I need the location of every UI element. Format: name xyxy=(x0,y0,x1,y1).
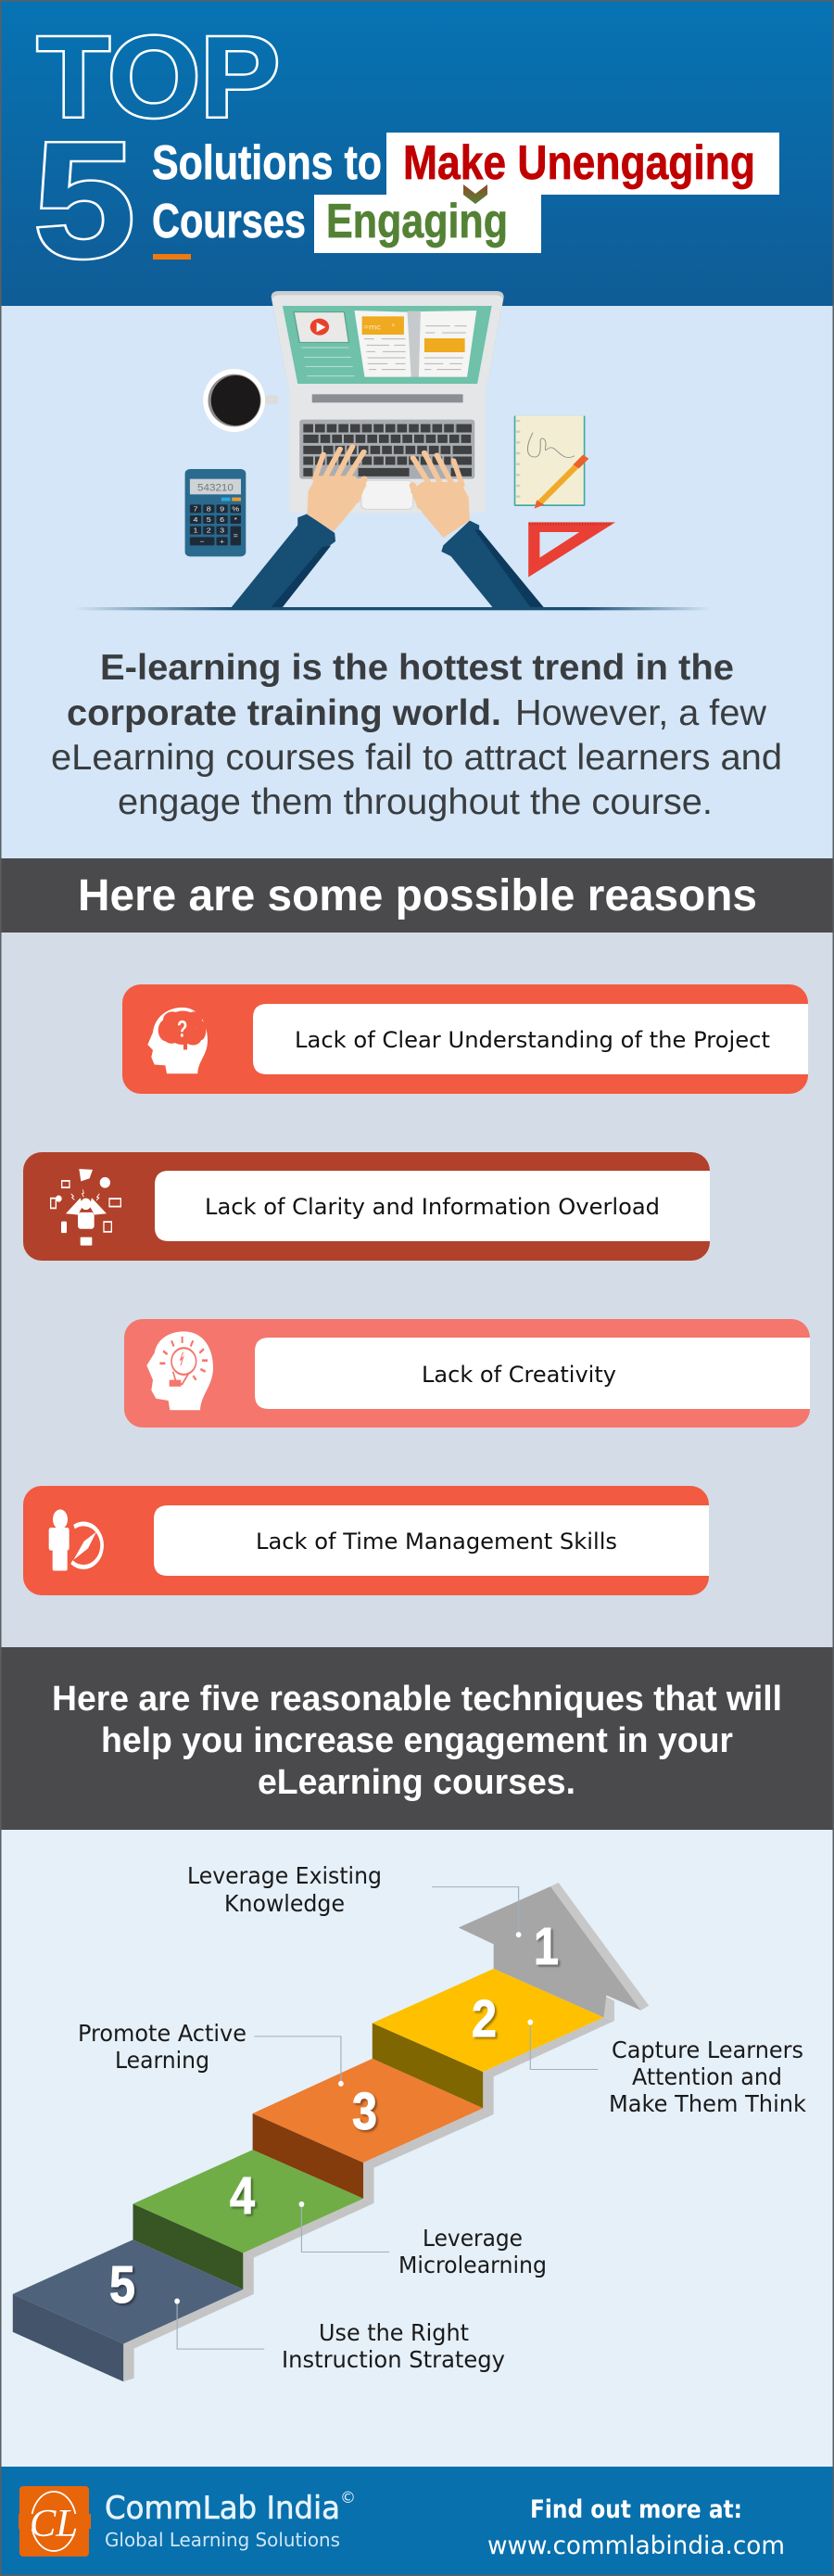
intro line 3: eLearning courses fail to attract learners and xyxy=(51,738,782,778)
label: promote active learning xyxy=(78,2020,246,2074)
title xyxy=(33,13,779,292)
section heading: five techniques: Here are five reasonable techniques that will xyxy=(52,1680,782,1719)
step numbers: 1 xyxy=(534,1917,559,1976)
label: leverage existing knowledge xyxy=(187,1862,382,1917)
step numbers: 4 xyxy=(230,2166,255,2226)
call to action: Find out more at: xyxy=(530,2495,742,2524)
icon: calculator: 5 xyxy=(207,516,211,524)
icon: calculator: 8 xyxy=(207,505,211,513)
step numbers: 5 xyxy=(109,2255,135,2315)
section heading: possible reasons: Here are some possible reasons xyxy=(78,871,757,920)
label: capture learners attention: Attention and xyxy=(632,2063,782,2090)
chart: staircase arrow xyxy=(13,1883,649,2381)
step numbers xyxy=(109,1917,559,2315)
right hand and sleeve xyxy=(411,452,544,607)
panel: reason 4 xyxy=(23,1486,709,1595)
copyright mark: © xyxy=(340,2489,356,2507)
section heading: five techniques xyxy=(0,1647,834,1830)
label: right instruction strategy: Instruction Strategy xyxy=(282,2346,505,2373)
laptop lid: 2 xyxy=(391,323,395,328)
title text: engaging: Engaging xyxy=(326,195,508,248)
step labels xyxy=(78,1862,807,2373)
icon: calculator: 6 xyxy=(220,516,225,524)
icon: calculator: 7 xyxy=(194,505,198,513)
reason 2 label: Lack of Clarity and Information Overload xyxy=(205,1194,660,1220)
highlight box: make unengaging xyxy=(386,133,779,195)
panel: reason 3 xyxy=(124,1319,810,1428)
icon: calculator: 4 xyxy=(194,516,198,524)
footer xyxy=(0,2467,834,2576)
title: outlined 5: 5 xyxy=(33,108,135,292)
label: leverage existing knowledge: Knowledge xyxy=(224,1890,345,1917)
icon: head with light bulb xyxy=(146,1331,213,1410)
label: capture learners attention xyxy=(609,2037,807,2117)
title text: make unengaging: Make Unengaging xyxy=(403,136,755,190)
left hand and sleeve xyxy=(232,447,367,607)
title text: solutions to: Solutions to xyxy=(152,136,382,190)
icon: calculator: = xyxy=(234,532,238,539)
logo: CommLab CL mark: CL xyxy=(30,2503,78,2545)
brand name: CommLab India xyxy=(105,2490,340,2527)
icon: calculator xyxy=(185,469,246,556)
icon: calculator: − xyxy=(199,538,205,545)
section heading: possible reasons xyxy=(0,858,834,933)
title: outlined TOP: TOP xyxy=(37,13,280,141)
panel: reason 1 xyxy=(122,984,808,1094)
icon: calculator: 9 xyxy=(220,505,225,513)
laptop base xyxy=(289,392,486,513)
panel: header banner xyxy=(0,0,834,306)
intro line 1: E-learning is the hottest trend in the xyxy=(100,648,734,688)
reason 1 label: Lack of Clear Understanding of the Project xyxy=(295,1027,770,1053)
label: leverage existing knowledge: Leverage Existing xyxy=(187,1862,382,1889)
icon: head with question mark: ? xyxy=(177,1016,187,1042)
label: right instruction strategy: Use the Right xyxy=(319,2319,469,2346)
logo: CommLab CL mark xyxy=(19,2486,91,2557)
icon: overloaded person xyxy=(51,1169,120,1246)
step 2 xyxy=(373,1969,614,2114)
label: capture learners attention: Capture Learners xyxy=(612,2037,803,2063)
icon: person with compass clock xyxy=(49,1509,102,1570)
reason 4 label: Lack of Time Management Skills xyxy=(256,1529,617,1554)
brand tagline: Global Learning Solutions xyxy=(105,2529,340,2551)
accent: orange bar xyxy=(153,254,191,260)
icon: calculator: * xyxy=(234,516,238,524)
icon: caret insertion mark xyxy=(463,184,487,204)
reason 3 label: Lack of Creativity xyxy=(422,1362,616,1388)
step 4 xyxy=(133,2150,374,2294)
label: leverage microlearning: Leverage xyxy=(423,2225,523,2252)
highlight box: engaging xyxy=(314,195,541,253)
icon: calculator: + xyxy=(220,538,224,545)
panel: intro background xyxy=(0,306,834,858)
step numbers: 2 xyxy=(472,1989,497,2049)
leader lines and dots xyxy=(174,1887,598,2349)
icon: notebook and pen xyxy=(514,415,586,509)
intro line 2 regular: However, a few xyxy=(515,693,767,733)
icon: coffee cup xyxy=(203,369,278,432)
label: leverage microlearning: Microlearning xyxy=(398,2252,547,2278)
icon: calculator: % xyxy=(232,505,239,513)
icon: calculator: 1 xyxy=(194,527,198,534)
panel: reason 2 xyxy=(23,1152,710,1261)
step 5 xyxy=(13,2240,254,2381)
step numbers: 3 xyxy=(352,2082,377,2141)
label: promote active learning: Promote Active xyxy=(78,2020,246,2047)
icon: set square ruler xyxy=(528,522,615,577)
label: promote active learning: Learning xyxy=(115,2047,209,2074)
illustration: laptop on desk xyxy=(74,291,710,610)
label: capture learners attention: Make Them Think xyxy=(609,2090,807,2117)
section heading: five techniques: eLearning courses. xyxy=(258,1763,575,1802)
panel: techniques background xyxy=(0,1830,834,2467)
website: www.commlabindia.com xyxy=(487,2532,785,2560)
icon: calculator: 543210 xyxy=(197,481,234,493)
section heading: five techniques: help you increase engagement in your xyxy=(101,1721,733,1760)
table line xyxy=(74,607,710,610)
step 1 arrowhead xyxy=(459,1883,649,2021)
step 3 xyxy=(253,2059,494,2203)
label: leverage microlearning xyxy=(398,2225,547,2278)
intro line 2 bold: corporate training world. xyxy=(67,693,501,733)
label: right instruction strategy xyxy=(282,2319,505,2373)
icon: head with question mark xyxy=(147,1008,208,1073)
icon: calculator: 3 xyxy=(220,527,225,534)
intro paragraph xyxy=(51,648,782,822)
laptop lid: =mc xyxy=(363,323,382,331)
icon: calculator: 2 xyxy=(207,527,211,534)
intro line 4: engage them throughout the course. xyxy=(118,782,713,822)
title text: courses: Courses xyxy=(152,195,306,248)
laptop lid xyxy=(272,291,504,393)
panel: reasons background xyxy=(0,933,834,1647)
